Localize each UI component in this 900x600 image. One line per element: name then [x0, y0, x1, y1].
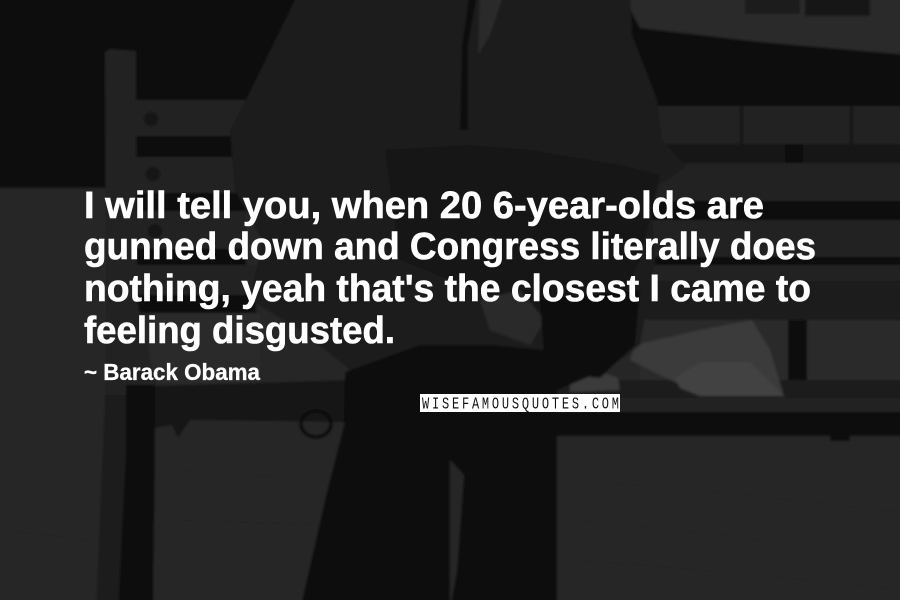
watermark text: WISEFAMOUSQUOTES.COM — [422, 396, 619, 414]
man's hands — [480, 290, 545, 345]
bench seat — [155, 380, 900, 441]
building at top right — [620, 0, 900, 106]
watermark — [420, 394, 620, 414]
quote line 3: nothing, yeah that's the closest I came to — [84, 268, 811, 310]
bench back slats left — [136, 100, 260, 383]
watermark background — [420, 394, 620, 412]
shopping bag — [570, 320, 784, 396]
quote line 1: I will tell you, when 20 6-year-olds are — [84, 185, 764, 227]
bench back slats right — [640, 106, 900, 382]
author attribution: ~ Barack Obama — [84, 359, 260, 385]
dark backdrop — [0, 0, 900, 190]
jacket sleeve over knee — [540, 290, 640, 378]
bench bolts — [144, 112, 162, 238]
bench post — [96, 49, 156, 600]
shin gap — [450, 460, 464, 600]
quote line 4: feeling disgusted. — [84, 310, 395, 352]
pavement — [0, 188, 900, 600]
strap loop — [301, 411, 331, 437]
quote text — [84, 185, 816, 352]
man's trousers — [300, 345, 600, 600]
man's jacket — [230, 0, 686, 375]
pavement cracks — [0, 450, 900, 590]
quote line 2: gunned down and Congress literally does — [84, 226, 816, 268]
jacket details — [245, 0, 660, 345]
